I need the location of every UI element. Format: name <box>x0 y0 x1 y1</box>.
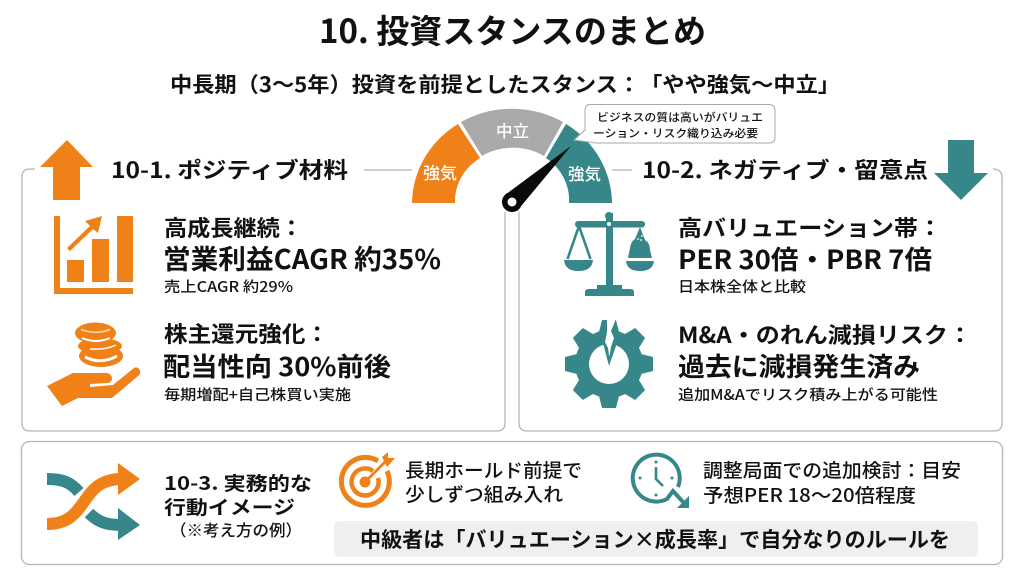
text block: shareholder returns: 株主還元強化： <box>164 317 329 349</box>
callout: ーション・リスク織り込み必要 <box>593 125 758 141</box>
icon: clock with down arrow <box>633 455 689 508</box>
panel: positive factors frame <box>22 169 505 431</box>
text block: high valuation: PER 30倍・PBR 7倍 <box>678 240 932 277</box>
text block: shareholder returns: 毎期増配+自己株買い実施 <box>164 384 352 405</box>
panel: practical action frame <box>22 442 1002 564</box>
text block: sustained growth: 高成長継続： <box>164 211 303 243</box>
gauge segment: bullish orange <box>412 124 480 203</box>
text block: add on dips: 予想PER 18〜20倍程度 <box>703 481 916 508</box>
subtitle: 中長期（3〜5年）投資を前提としたスタンス：「やや強気〜中立」 <box>170 69 840 99</box>
text block: sustained growth <box>163 211 441 297</box>
text block: M&A goodwill risk <box>678 318 972 405</box>
gauge label: center: 中立 <box>496 118 529 142</box>
text block: long-term hold: 長期ホールド前提で <box>405 456 582 483</box>
icon: balance scale <box>564 212 654 296</box>
text block: sustained growth: 営業利益CAGR 約35% <box>163 238 441 277</box>
text block: practical action heading: 10-3. 実務的な <box>164 469 312 496</box>
heading: negative factors: 10-2. ネガティブ・留意点 <box>642 153 928 185</box>
text block: sustained growth: 売上CAGR 約29% <box>164 276 293 297</box>
gauge label: right: 強気 <box>568 161 601 185</box>
text block: practical action heading: （※考え方の例） <box>170 517 302 541</box>
callout: ビジネスの質は高いがバリュエ <box>597 109 763 125</box>
heading: positive factors: 10-1. ポジティブ材料 <box>111 153 348 185</box>
text block: add on dips <box>703 456 961 508</box>
icon: shuffle arrows <box>47 463 140 540</box>
text block: long-term hold: 少しずつ組み入れ <box>405 480 563 507</box>
text block: practical action heading: 行動イメージ <box>164 493 295 520</box>
gauge <box>412 109 612 212</box>
icon: coins in hand <box>47 322 140 406</box>
icon: up arrow <box>40 140 93 200</box>
icon: growth bar chart <box>54 216 133 294</box>
text block: M&A goodwill risk: 追加M&Aでリスク積み上がる可能性 <box>678 384 938 405</box>
icon: target <box>341 452 395 505</box>
icon: down arrow <box>934 140 988 200</box>
title: 10. 投資スタンスのまとめ <box>319 5 706 53</box>
text block: high valuation: 高バリュエーション帯： <box>678 211 942 243</box>
text block: high valuation: 日本株全体と比較 <box>678 276 807 297</box>
text block: long-term hold <box>405 456 582 507</box>
gauge needle <box>502 146 571 212</box>
icon: cracked gear <box>565 317 653 408</box>
callout: intermediate investor note: 中級者は「バリュエーション×成長率」で自分なりのルールを <box>360 524 950 554</box>
text block: shareholder returns <box>163 317 391 405</box>
text block: M&A goodwill risk: 過去に減損発生済み <box>678 347 920 384</box>
panel: negative factors frame <box>519 169 1002 431</box>
text block: shareholder returns: 配当性向 30%前後 <box>163 347 391 384</box>
callout <box>574 104 775 143</box>
text block: high valuation <box>678 211 942 297</box>
text block: add on dips: 調整局面での追加検討：目安 <box>703 456 961 483</box>
gauge segment: neutral gray <box>461 109 563 156</box>
text block: practical action heading <box>164 469 312 541</box>
text block: M&A goodwill risk: M&A・のれん減損リスク： <box>678 318 972 350</box>
gauge label: left: 強気 <box>423 160 457 184</box>
gauge segment: teal <box>546 124 612 203</box>
